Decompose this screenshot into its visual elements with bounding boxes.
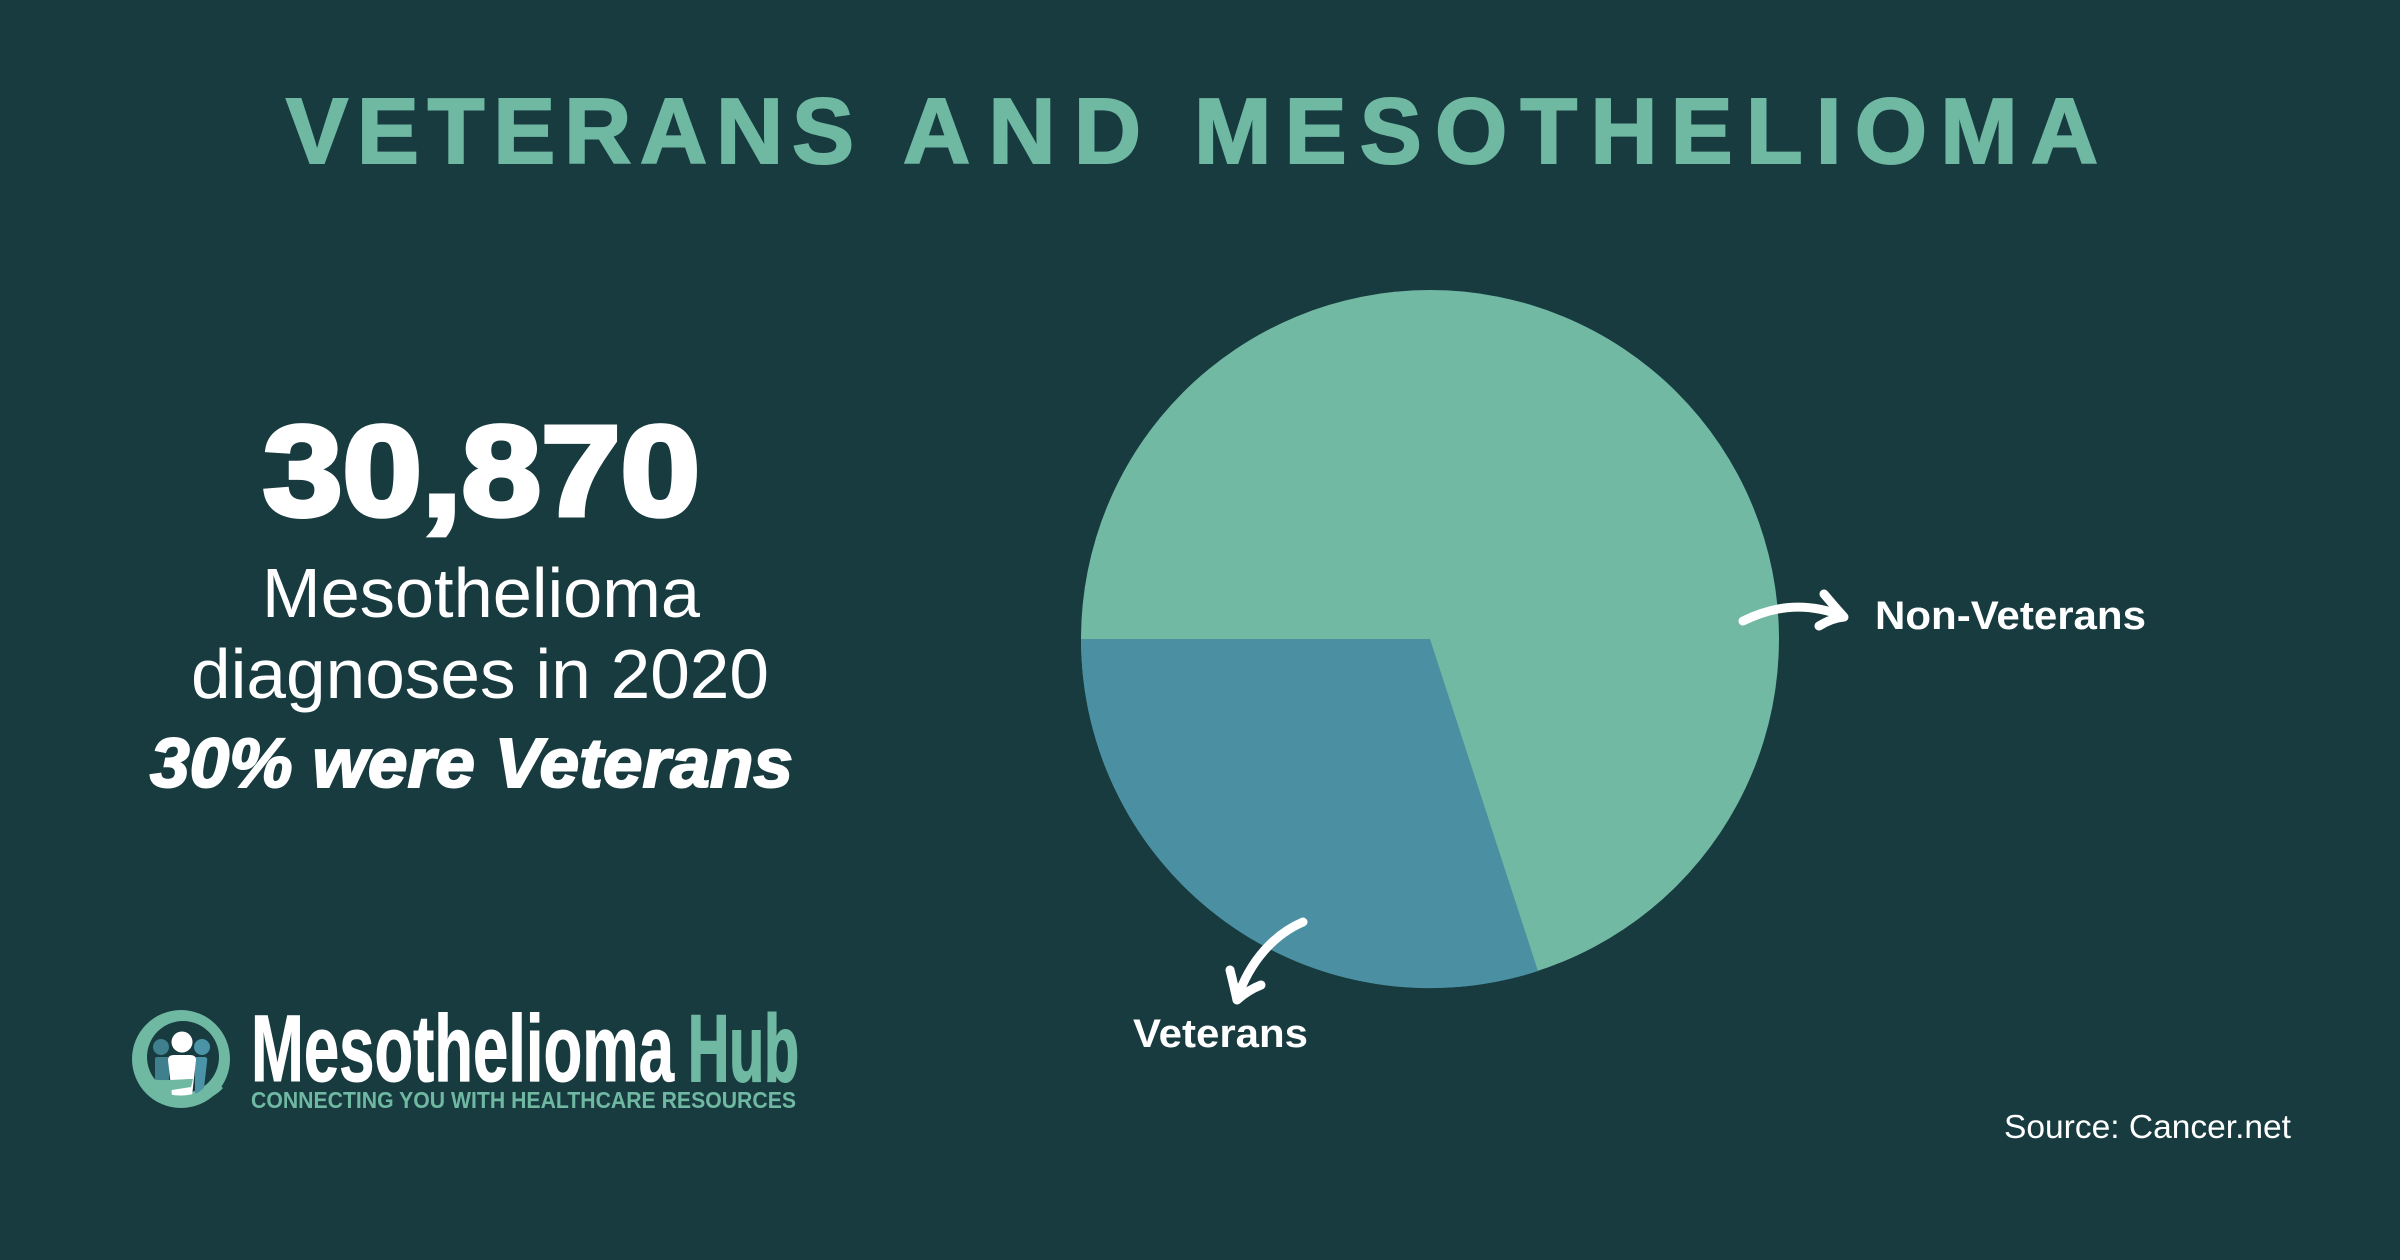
label: non-veterans: Non-Veterans: [1875, 594, 2146, 638]
title: MESOTHELIOMA: [1194, 79, 2098, 183]
title: VETERANS: [286, 79, 854, 183]
source note: Source: Cancer.net: [2004, 1108, 2291, 1145]
logo: [132, 996, 799, 1113]
description text: [191, 554, 769, 713]
title: [286, 79, 2098, 183]
arrow: non-veterans: [1743, 594, 1844, 626]
arrow: veterans: [1230, 922, 1303, 1000]
title: AND: [903, 79, 1141, 183]
label: veterans: Veterans: [1133, 1012, 1308, 1056]
description text: diagnoses in 2020: [191, 635, 769, 713]
veterans percentage: 30% were Veterans: [150, 724, 793, 802]
logo wordmark: Mesothelioma: [251, 996, 675, 1102]
big number: 30,870: [263, 400, 700, 543]
panel: headline statistic: [150, 400, 793, 802]
icon: ring with people and hand: [132, 1010, 230, 1108]
slice: veterans: [1081, 639, 1538, 988]
logo tagline: CONNECTING YOU WITH HEALTHCARE RESOURCES: [251, 1087, 796, 1113]
description text: Mesothelioma: [262, 554, 700, 632]
pie chart: [1081, 290, 1779, 988]
logo wordmark accent: Hub: [688, 996, 799, 1102]
slice: non-veterans: [1081, 290, 1779, 988]
